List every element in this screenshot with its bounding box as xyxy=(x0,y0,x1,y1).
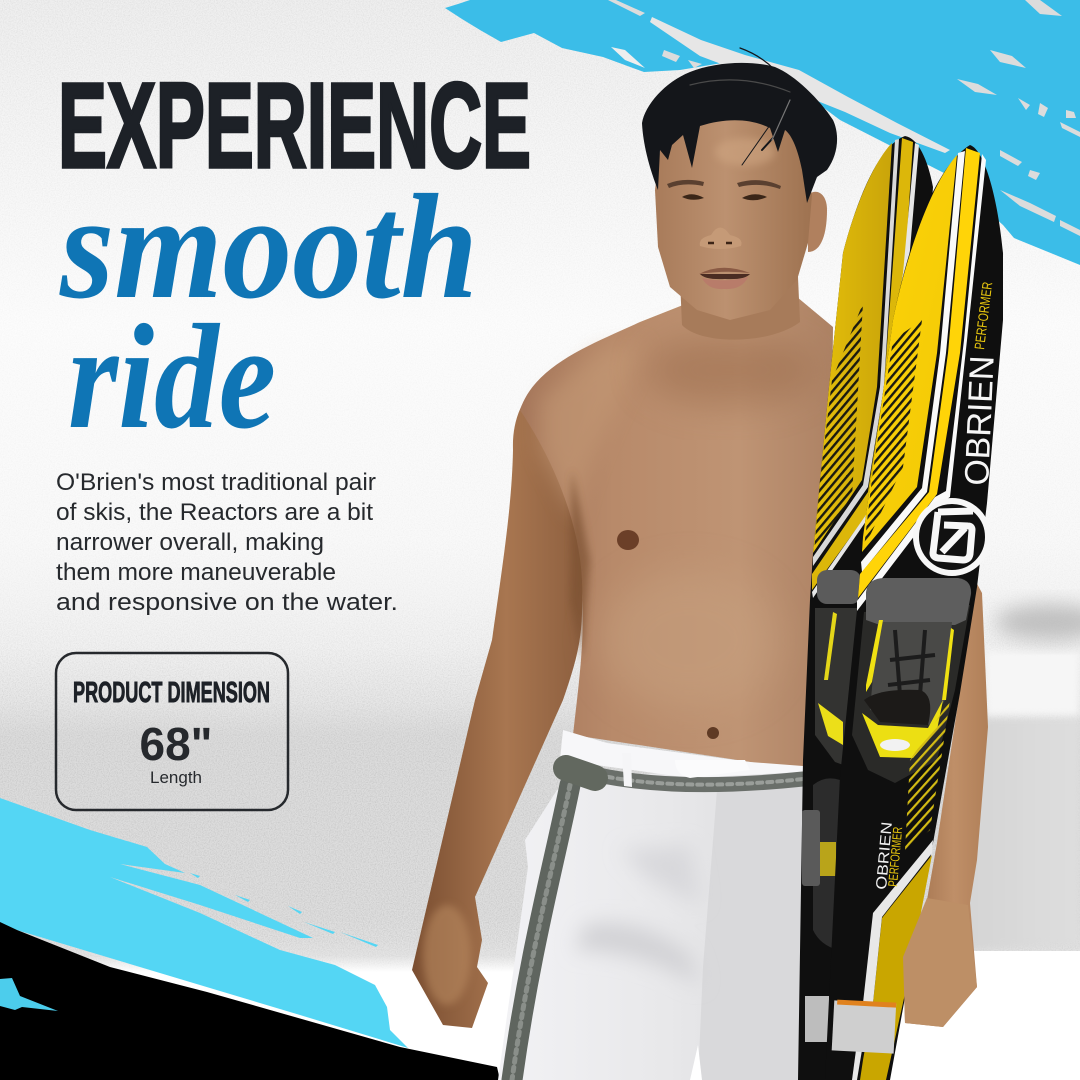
right arm xyxy=(903,580,988,1027)
back lower plate xyxy=(813,778,840,950)
title: ride: ride xyxy=(68,294,276,460)
product dimension box xyxy=(56,653,288,810)
belt tab xyxy=(622,753,632,787)
left hand highlight xyxy=(423,905,471,1005)
gap between legs xyxy=(690,1045,702,1080)
front ski yellow stripe xyxy=(858,148,980,598)
description text: O'Brien's most traditional pair xyxy=(56,469,376,496)
back ski yellow stripe xyxy=(812,138,913,590)
back ski xyxy=(798,136,933,1080)
face xyxy=(655,108,812,320)
brush: flecks top right xyxy=(608,0,1080,236)
brush: top right blue xyxy=(445,0,1080,265)
binding base plate xyxy=(852,605,970,783)
shoulder shading xyxy=(540,345,645,520)
lower white stripe tail xyxy=(852,1050,862,1080)
front ski white stripe 2 xyxy=(857,154,986,611)
lower model text: PERFORMER xyxy=(885,826,905,887)
background: sand right xyxy=(680,951,1080,1080)
water skis xyxy=(798,136,1003,1080)
brows xyxy=(667,180,781,189)
front ski white stripe 1 xyxy=(861,151,965,572)
chest highlight xyxy=(600,570,780,710)
boot yellow heel xyxy=(862,700,943,758)
description text: of skis, the Reactors are a bit xyxy=(56,499,373,526)
hair strands xyxy=(690,48,790,165)
pants xyxy=(498,770,803,1080)
eyes xyxy=(682,194,767,200)
rope knot xyxy=(566,768,595,778)
rope belt xyxy=(598,775,803,785)
forehead highlight xyxy=(715,138,775,166)
nipple xyxy=(617,530,639,550)
binding laces xyxy=(888,630,935,695)
back ski body xyxy=(798,136,933,1080)
title: smooth: smooth xyxy=(59,164,478,330)
left arm xyxy=(412,380,583,1028)
waistband xyxy=(560,730,803,778)
description text: narrower overall, making xyxy=(56,529,324,556)
logo glyph xyxy=(933,511,973,560)
brush: small blue fleck on black xyxy=(0,978,58,1011)
binding pad xyxy=(866,578,971,625)
navel xyxy=(707,727,719,739)
mouth xyxy=(699,268,750,289)
description text xyxy=(56,469,398,616)
ski brand text: OBRIEN xyxy=(958,355,1002,486)
warning label xyxy=(832,1000,896,1054)
binding yellow lines xyxy=(866,620,883,692)
binding boot interior xyxy=(870,622,952,725)
back ski yellow panel xyxy=(813,143,892,553)
pants right leg xyxy=(698,770,803,1080)
armpit shadow xyxy=(570,470,590,660)
lower yellow xyxy=(860,855,932,1080)
brush: bottom streaks xyxy=(190,873,378,947)
nostrils xyxy=(708,242,732,244)
background: mist patch xyxy=(995,604,1080,640)
lower white stripe xyxy=(863,840,933,1003)
waistband button xyxy=(675,760,750,778)
rope tail xyxy=(512,785,570,1080)
description text: them more maneuverable xyxy=(56,559,336,586)
neck xyxy=(680,255,800,340)
front ski body xyxy=(825,145,1003,1080)
lower brand text: OBRIEN xyxy=(873,821,896,890)
brush: bottom left black xyxy=(0,922,500,1080)
background: white strip above sea xyxy=(985,650,1080,716)
box label: Length xyxy=(150,768,202,787)
man figure xyxy=(412,48,988,1080)
description text: and responsive on the water. xyxy=(56,589,398,616)
torso xyxy=(520,297,833,770)
nose xyxy=(700,228,742,249)
back warning label xyxy=(805,996,829,1042)
binding xyxy=(852,578,971,783)
yellow hatch xyxy=(905,700,950,850)
background: sea band xyxy=(960,718,1080,950)
back ski thin white xyxy=(812,143,919,598)
ski model text: PERFORMER xyxy=(971,281,995,350)
box heading: PRODUCT DIMENSION xyxy=(73,677,270,709)
right hand xyxy=(903,898,977,1027)
pants fold shadows xyxy=(575,845,700,985)
logo ring xyxy=(916,501,988,573)
boot cavity xyxy=(864,690,930,725)
box value: 68" xyxy=(140,718,212,770)
back yellow patch xyxy=(820,842,836,876)
back ski white stripe xyxy=(813,139,899,566)
ear xyxy=(808,192,827,252)
back plate bracket xyxy=(802,810,820,886)
brush: bottom left blue xyxy=(0,798,408,1048)
back ski hatch xyxy=(814,303,863,552)
front ski xyxy=(825,145,1003,1080)
front ski hatch xyxy=(864,320,922,548)
back binding xyxy=(815,570,861,770)
front ski yellow panel xyxy=(862,155,957,552)
title: EXPERIENCE: EXPERIENCE xyxy=(58,57,531,193)
belt rope and tails xyxy=(512,768,803,1080)
hair xyxy=(642,63,837,203)
heel logo xyxy=(880,739,910,751)
upper chest shadow xyxy=(645,335,815,405)
